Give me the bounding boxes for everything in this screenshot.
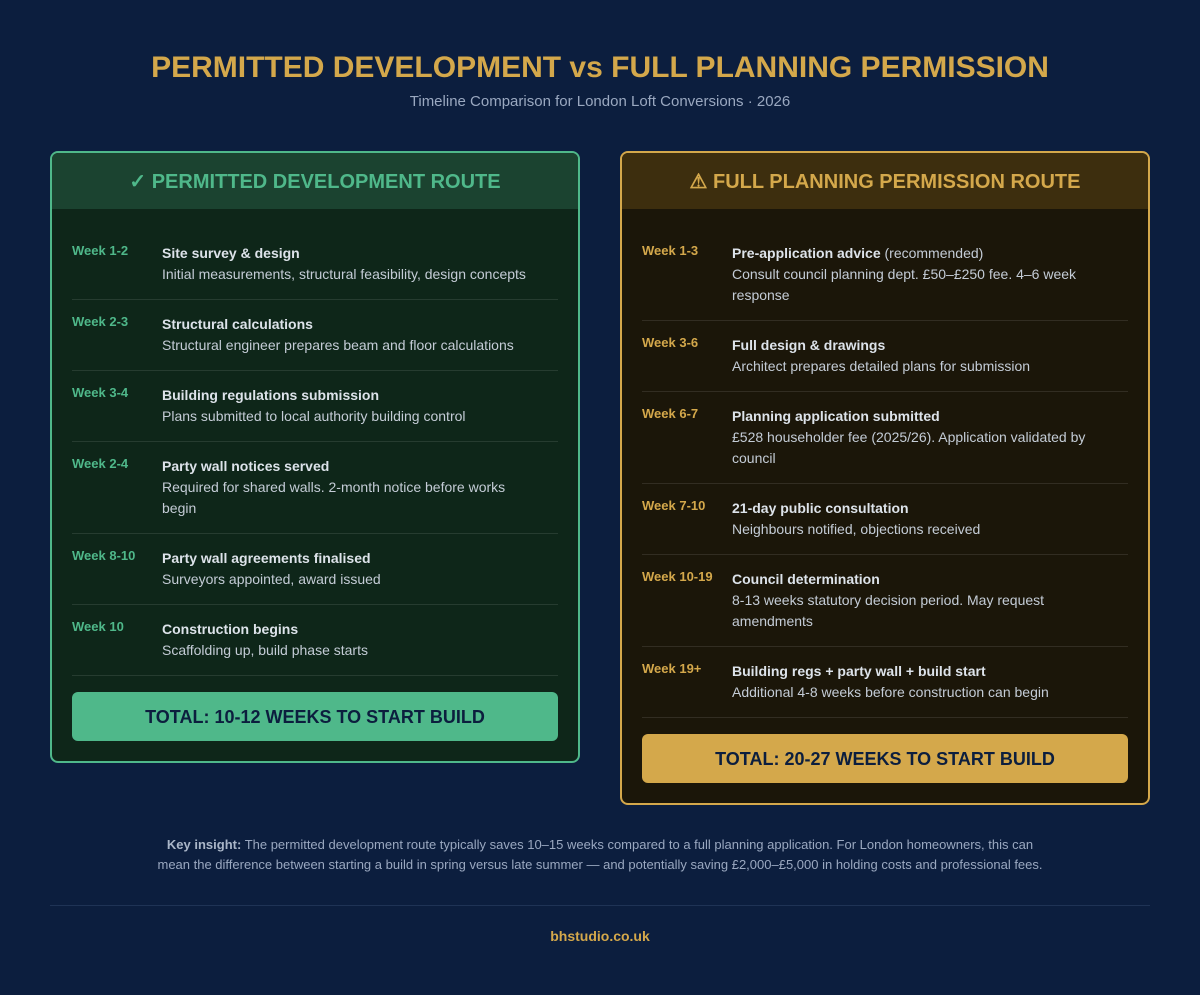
row: week 3-6: Full design & drawings: [732, 337, 885, 353]
row: week 8-10: [72, 534, 558, 605]
row: week 10-19: Week 10-19: [642, 569, 713, 584]
row: week 1-2: Initial measurements, structural feasibility, design concepts: [162, 266, 526, 282]
row: week 6-7: Week 6-7: [642, 406, 698, 421]
total: TOTAL: 20-27 WEEKS TO START BUILD: [715, 749, 1055, 769]
row: week 8-10: Surveyors appointed, award issued: [162, 571, 381, 587]
row: week 7-10: Neighbours notified, objections received: [732, 521, 980, 537]
row: week 6-7: Planning application submitted: [732, 408, 940, 424]
row: week 3-4: Week 3-4: [72, 385, 128, 400]
title: PERMITTED DEVELOPMENT vs FULL PLANNING PERMISSION: [151, 51, 1049, 84]
row: week 7-10: 21-day public consultation: [732, 500, 909, 516]
row: week 3-6: [642, 321, 1128, 392]
row: week 10: [72, 605, 558, 676]
row: week 2-3: Week 2-3: [72, 314, 128, 329]
row: week 6-7: [642, 392, 1128, 484]
row: week 1-2: Week 1-2: [72, 243, 128, 258]
row: week 1-3: [642, 229, 1128, 321]
row: week 3-4: Plans submitted to local authority building control: [162, 408, 466, 424]
row: week 3-6: Week 3-6: [642, 335, 698, 350]
row: week 1-2: Site survey & design: [162, 245, 300, 261]
row: week 2-4: [72, 442, 558, 534]
row: week 10: Construction begins: [162, 621, 298, 637]
row: week 10-19: Council determination: [732, 571, 880, 587]
panel: full planning: [620, 151, 1150, 805]
row: week 3-4: [72, 371, 558, 442]
row: week 10: Scaffolding up, build phase starts: [162, 642, 368, 658]
row: week 2-3: Structural engineer prepares beam and floor calculations: [162, 337, 514, 353]
row: week 6-7: £528 householder fee (2025/26). Application validated by council: [732, 429, 1085, 466]
row: week 19+: Building regs + party wall + build start: [732, 663, 986, 679]
row: week 10-19: [642, 555, 1128, 647]
row: week 8-10: Week 8-10: [72, 548, 135, 563]
row: week 2-4: Party wall notices served: [162, 458, 329, 474]
row: week 7-10: Week 7-10: [642, 498, 705, 513]
row: week 19+: Week 19+: [642, 661, 701, 676]
row: week 1-3: Pre-application advice (recommended): [732, 245, 983, 261]
panel header: ✓ PERMITTED DEVELOPMENT ROUTE: [129, 171, 501, 193]
row: week 1-3: Consult council planning dept. £50–£250 fee. 4–6 week response: [732, 266, 1076, 303]
row: week 2-3: Structural calculations: [162, 316, 313, 332]
row: week 2-4: Week 2-4: [72, 456, 128, 471]
total: [642, 734, 1128, 783]
panel header: ⚠ FULL PLANNING PERMISSION ROUTE: [690, 171, 1080, 193]
row: week 3-6: Architect prepares detailed plans for submission: [732, 358, 1030, 374]
row: week 1-2: [72, 229, 558, 300]
row: week 8-10: Party wall agreements finalised: [162, 550, 371, 566]
subtitle: Timeline Comparison for London Loft Conversions · 2026: [410, 93, 790, 110]
key insight: Key insight: The permitted development route typically saves 10–15 weeks compared to a full planning application. For London homeowners, this can mean the difference between starting a build in spring versus late summer — and potentially saving £2,000–£5,000 in holding costs and professional fees.: [157, 837, 1043, 872]
row: week 3-4: Building regulations submission: [162, 387, 379, 403]
row: week 1-3: Week 1-3: [642, 243, 698, 258]
row: week 10-19: 8-13 weeks statutory decision period. May request amendments: [732, 592, 1044, 629]
footer: bhstudio.co.uk: [550, 928, 650, 944]
panel header: [622, 153, 1148, 209]
row: week 19+: [642, 647, 1128, 718]
row: week 2-4: Required for shared walls. 2-month notice before works begin: [162, 479, 505, 516]
panel header: [52, 153, 578, 209]
total: [72, 692, 558, 741]
row: week 2-3: [72, 300, 558, 371]
total: TOTAL: 10-12 WEEKS TO START BUILD: [145, 707, 485, 727]
row: week 10: Week 10: [72, 619, 124, 634]
row: week 19+: Additional 4-8 weeks before construction can begin: [732, 684, 1049, 700]
row: week 7-10: [642, 484, 1128, 555]
panel: permitted development: [50, 151, 580, 763]
